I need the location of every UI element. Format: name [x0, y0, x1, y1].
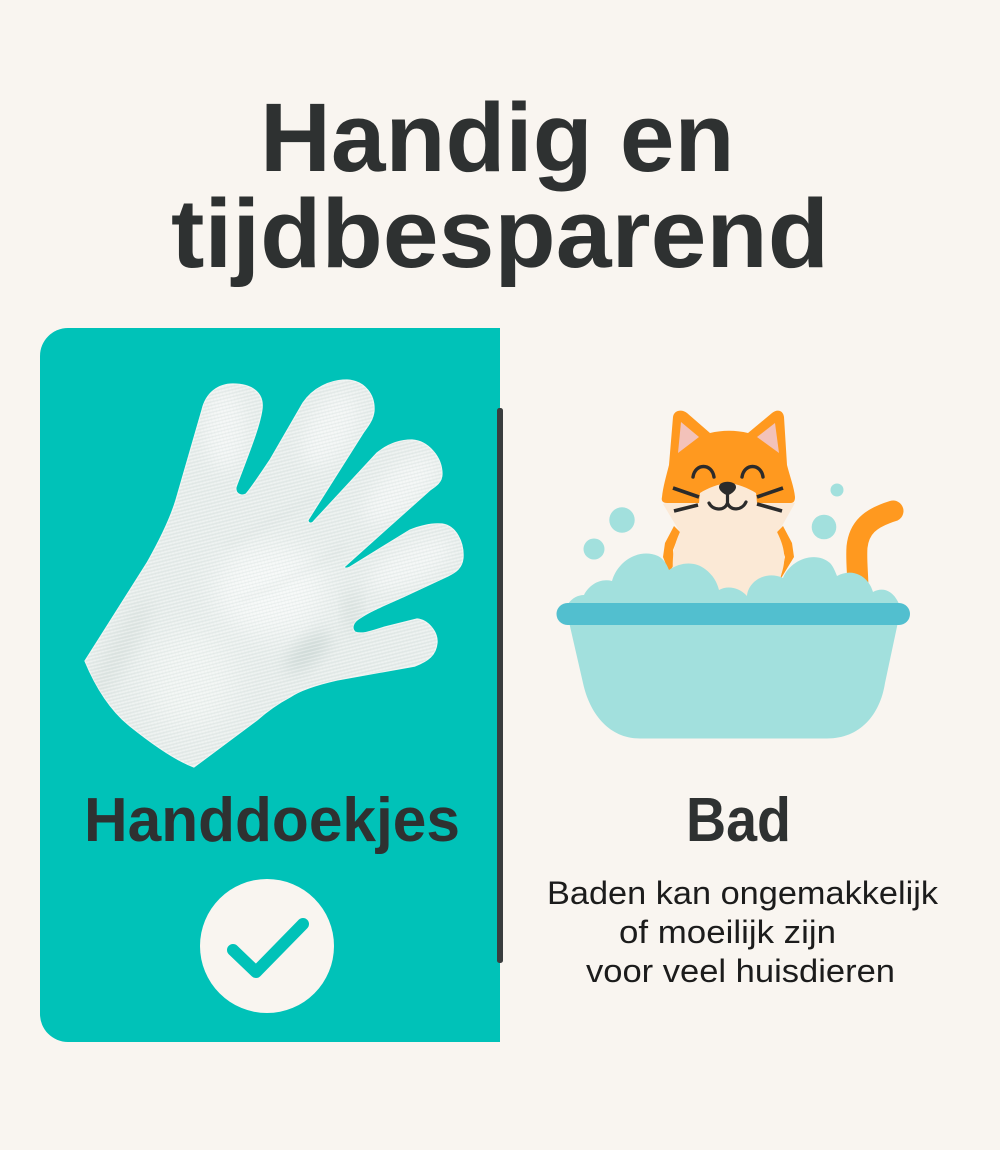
- cat ears inner: [678, 422, 779, 453]
- text block: bath description: Baden kan ongemakkelijk: [547, 875, 939, 911]
- heading: Bad: Bad: [686, 786, 791, 855]
- icon: cat in bathtub: [556, 411, 910, 738]
- cat nose: [719, 482, 736, 495]
- text block: bath description: [547, 875, 939, 989]
- foam: [568, 554, 899, 604]
- tub rim: [556, 603, 910, 625]
- heading: Handdoekjes: Handdoekjes: [84, 786, 460, 855]
- cat tail: [857, 511, 893, 590]
- title: Handig en: [260, 83, 734, 192]
- cat face: [673, 466, 783, 511]
- cat body: [663, 480, 795, 610]
- icon: check mark badge: [200, 879, 334, 1013]
- cat arms: [663, 526, 794, 580]
- tub: [569, 622, 898, 738]
- text block: bath description: of moeilijk zijn: [619, 914, 836, 950]
- text block: bath description: voor veel huisdieren: [586, 953, 895, 989]
- title: tijdbesparend: [171, 179, 829, 288]
- title: [171, 83, 829, 288]
- icon: white cleaning glove: [84, 379, 464, 768]
- panel: Handdoekjes: [40, 328, 500, 1042]
- divider line: [497, 408, 503, 963]
- soap bubbles: [584, 484, 844, 560]
- cat head: [662, 411, 795, 503]
